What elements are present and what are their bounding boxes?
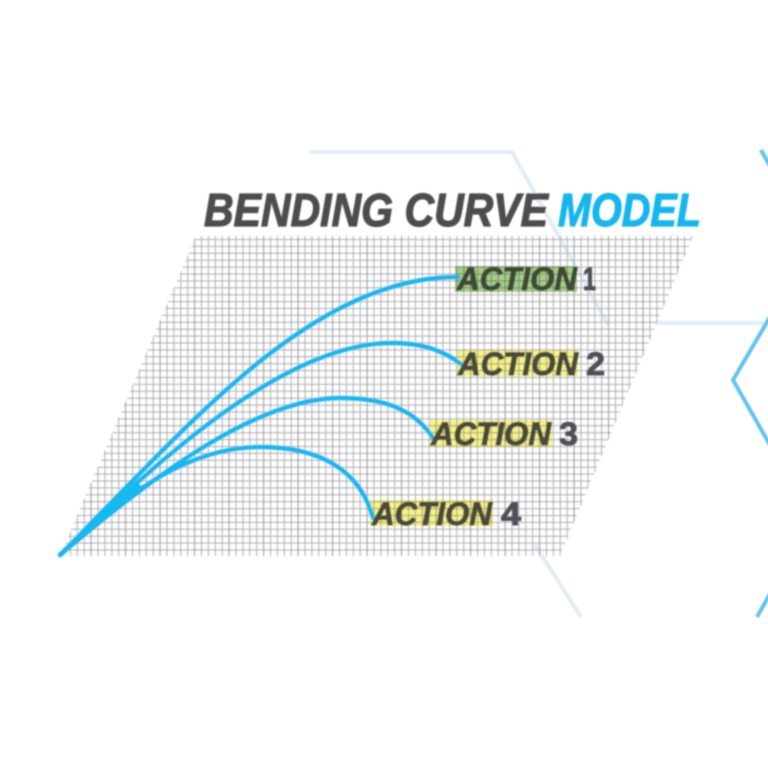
label: action 4: ACTION — [371, 496, 493, 532]
grid parallelogram — [50, 230, 700, 560]
bending curves — [60, 277, 461, 555]
bending curve model infographic — [56, 148, 768, 619]
label: action 3: ACTION — [430, 416, 552, 452]
label: action 4: 4 — [501, 496, 521, 532]
title: BENDING CURVE — [204, 184, 549, 236]
action label highlights — [370, 266, 578, 526]
label: action 2: ACTION — [457, 346, 579, 382]
curve origin tip — [59, 481, 142, 556]
label: action 1: 1 — [583, 261, 596, 297]
blue hexagon outline at right edge — [733, 150, 768, 617]
title: MODEL — [558, 184, 701, 236]
label: action 2: 2 — [586, 346, 605, 382]
pale hexagon outline background — [309, 152, 768, 617]
label: action 3: 3 — [559, 416, 578, 452]
label: action 1: ACTION — [456, 261, 578, 297]
